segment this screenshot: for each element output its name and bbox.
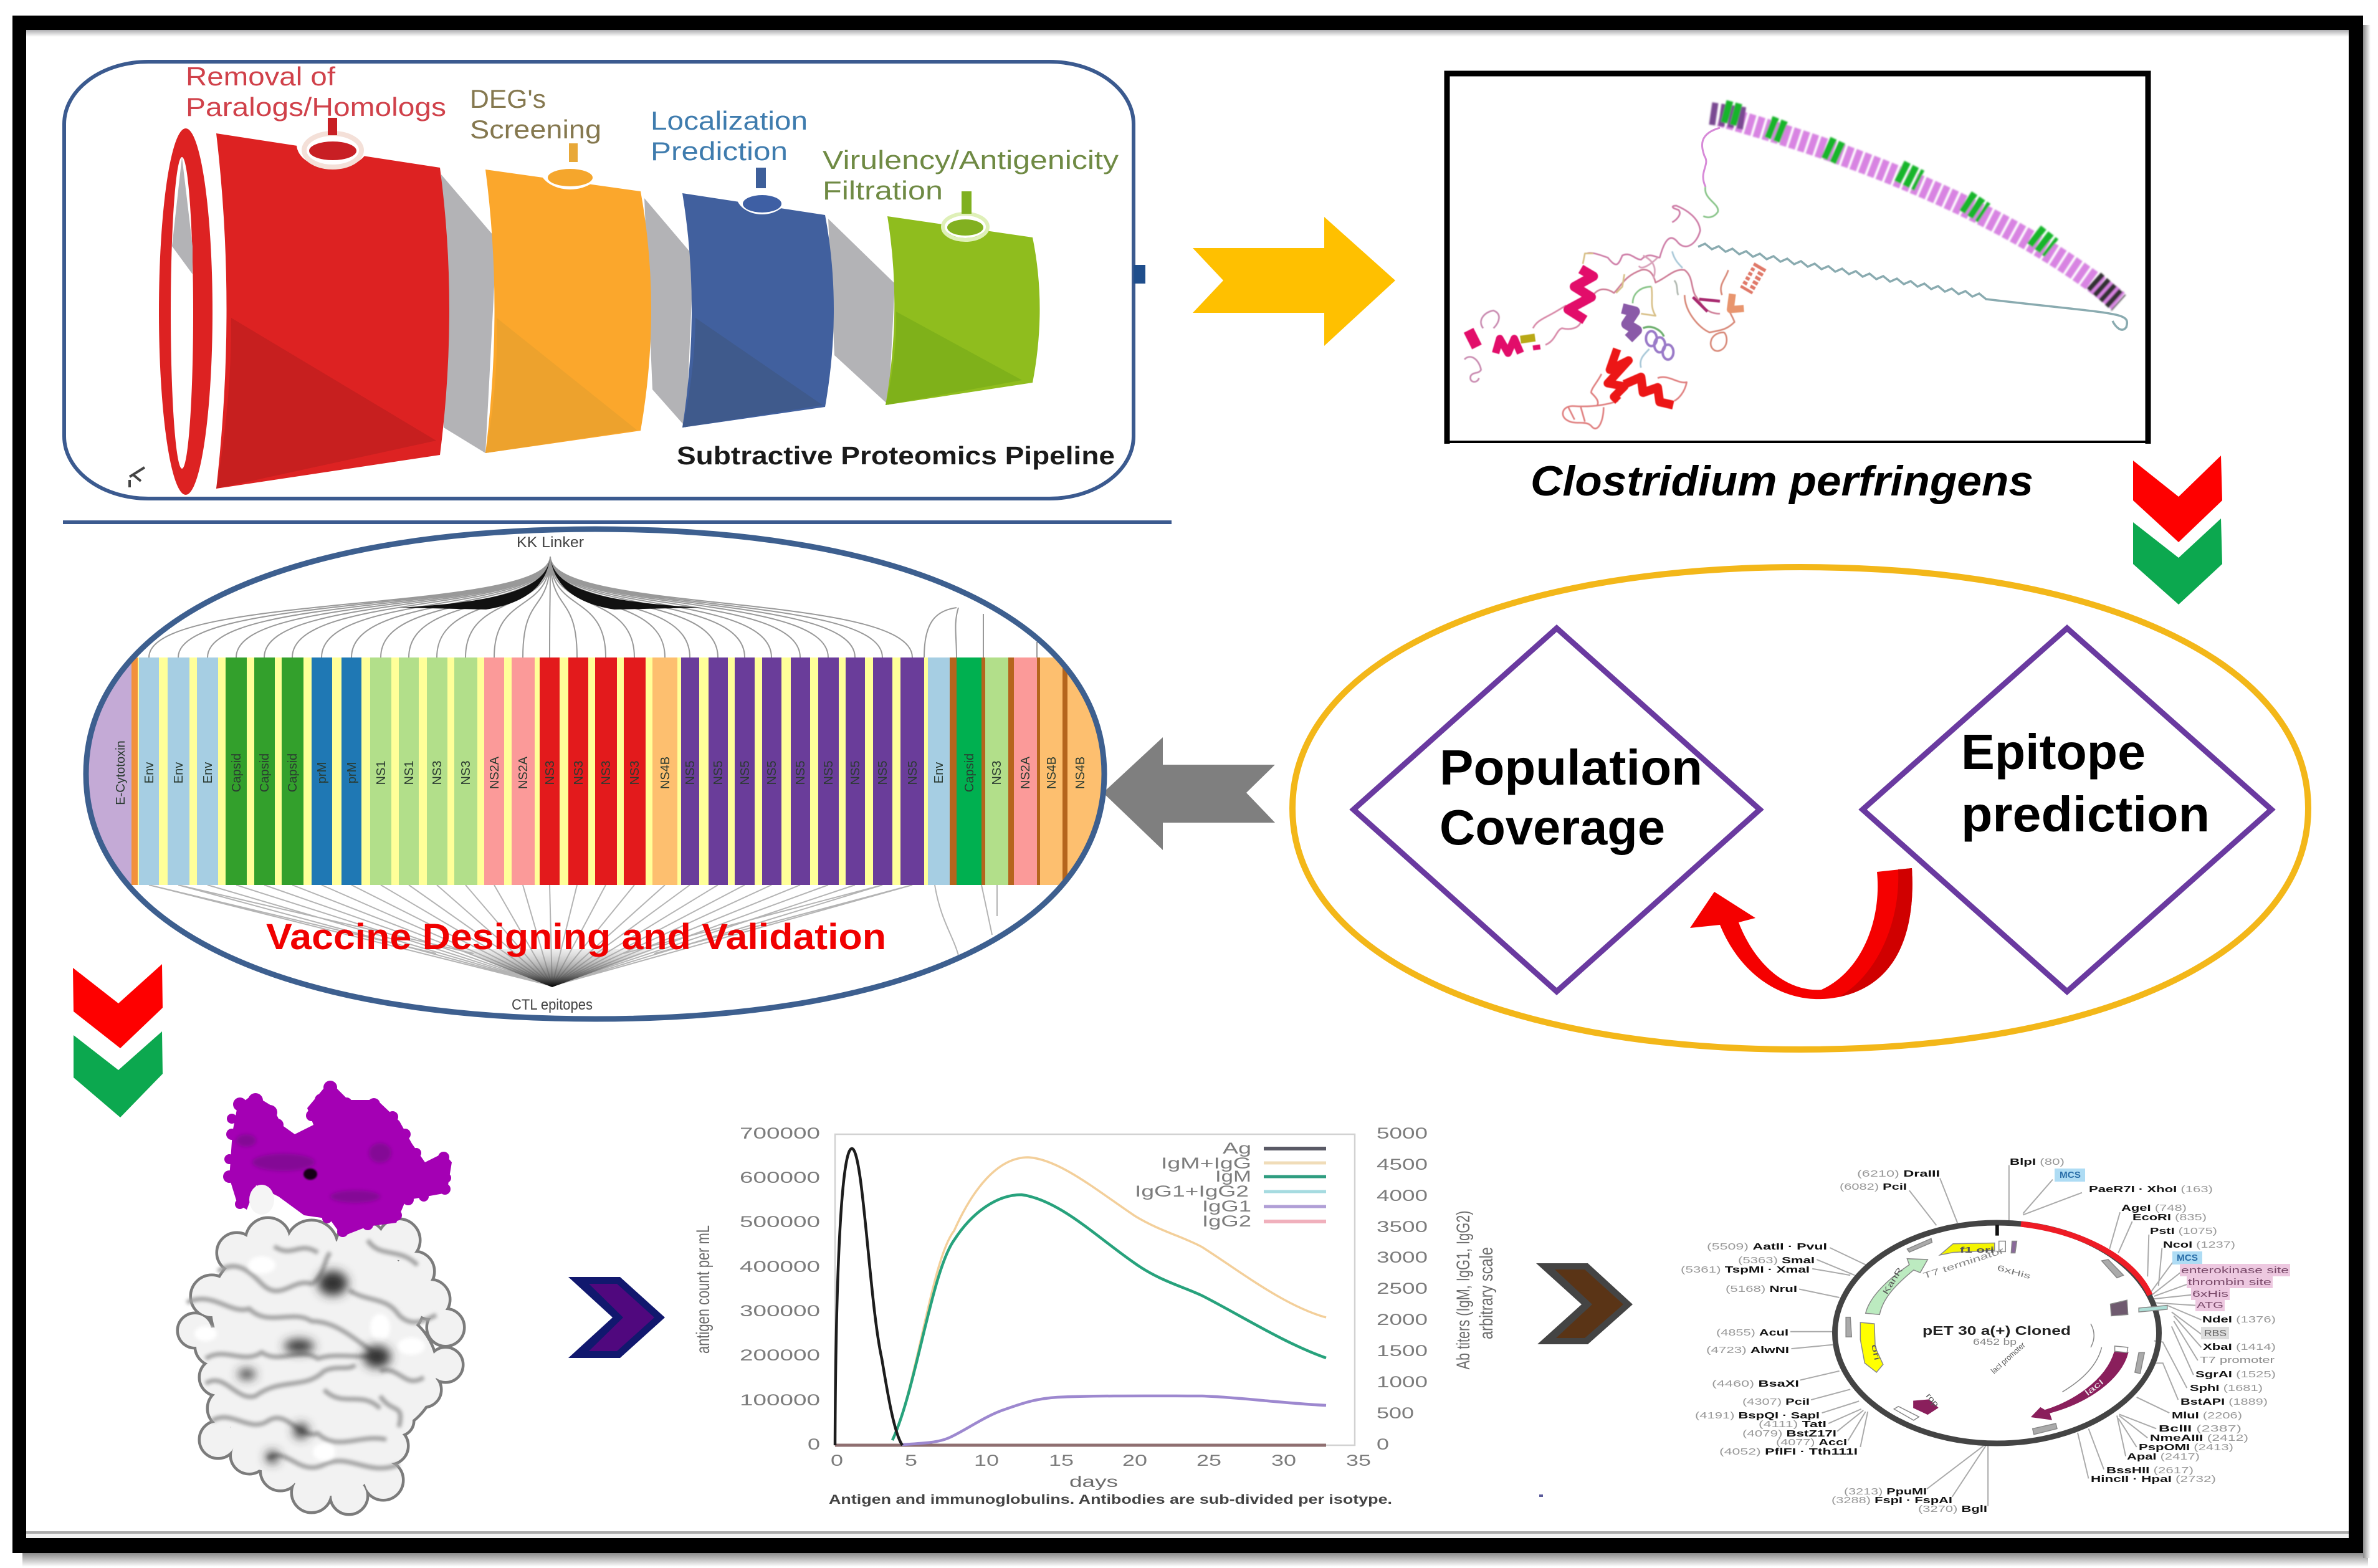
bar labels: Capsid [230,753,244,792]
chart legend: IgM+IgG [1161,1155,1251,1172]
bar labels: NS3 [572,761,586,785]
bar labels: NS5 [684,761,697,785]
bar labels: NS2A [517,756,530,789]
left axis labels: 700000 [740,1125,820,1142]
restriction site labels: PaeR7I · XhoI (163) [2089,1184,2213,1195]
panel: epitope prediction ellipse [1292,567,2308,1049]
small feature names: lacI promoter [1989,1340,2027,1375]
bar labels: NS2A [488,756,502,789]
restriction site labels: (4052) PflFI · Tth111I [1719,1446,1858,1457]
gray surface [179,1219,463,1513]
restriction site labels: BlpI (80) [2010,1157,2065,1167]
dark cavities [238,1271,391,1463]
restriction site labels: NdeI (1376) [2202,1314,2276,1325]
stage label: removal of paralogs/homologs: Removal of [186,62,335,91]
bar labels: NS3 [543,761,557,785]
small feature names: rop [1924,1391,1941,1408]
restriction site labels: thrombin site [2188,1277,2271,1288]
restriction site labels: (4723) AlwNI [1706,1345,1789,1355]
chart legend: IgG1 [1202,1198,1251,1215]
restriction site labels: ApaI (2417) [2127,1451,2200,1462]
structure frame [1446,74,2149,444]
immune simulation chart [693,1125,1497,1507]
restriction site labels: (6210) DraIII [1857,1169,1940,1179]
x axis labels [831,1452,1371,1470]
wiggly coil [1698,244,2127,330]
right axis title: Ab titers (IgM, IgG1, IgG2) [1453,1210,1474,1370]
feature tags [2055,1169,2290,1339]
right axis labels: 0 [1377,1436,1389,1453]
restriction site labels: (3288) FspI · FspAI [1831,1495,1952,1506]
restriction site labels: (4855) AcuI [1716,1327,1788,1338]
funnel stage: green [886,191,1039,405]
bar labels: E-Cytotoxin [114,740,128,805]
restriction site labels: (3213) PpuMI [1844,1486,1927,1497]
bar labels [114,740,1087,805]
x axis labels: 0 [831,1452,843,1470]
restriction site labels: EcoRI (835) [2132,1212,2207,1223]
plasmid ring [1835,1223,2159,1443]
funnel stage: red [159,118,449,495]
funnel stage: blue [682,168,834,428]
vaccine 3D surface model [179,1081,463,1513]
surface highlights [194,1256,425,1461]
bar labels: NS3 [599,761,613,785]
arrow: gray left [1103,737,1275,850]
chart legend: IgG1+IgG2 [1135,1183,1249,1200]
restriction site labels: (4079) BstZ17I [1742,1428,1836,1439]
divider line [63,520,1172,524]
bar labels: NS5 [849,761,862,785]
tree bottom label: CTL epitopes [512,997,593,1013]
epitope tree upper lines [149,557,1037,657]
restriction site labels: (4191) BspQI · SapI [1695,1410,1820,1421]
bar labels: Capsid [286,753,300,792]
bar labels: Capsid [963,753,977,792]
bar labels: Env [932,762,946,783]
restriction site labels: (4077) AccI [1776,1437,1847,1448]
purple shading [236,1134,391,1203]
chart legend: IgM [1215,1168,1251,1185]
curve: IgG2 [835,1443,1326,1447]
upper loop [1702,128,1720,187]
bar labels: NS5 [794,761,808,785]
yellow ellipse [1292,567,2308,1049]
restriction site labels: MluI (2206) [2172,1410,2242,1421]
right axis title [1453,1210,1497,1370]
curve: IgG1 [902,1396,1326,1445]
red helix [1608,349,1673,405]
x axis labels: 20 [1122,1452,1147,1470]
connector tick [1134,265,1145,284]
x axis title: days [1069,1473,1118,1491]
label: epitope prediction [1961,724,2210,842]
peptide bars [87,657,1103,885]
restriction site labels: AgeI (748) [2121,1203,2187,1213]
x axis labels: 30 [1271,1452,1296,1470]
restriction site labels: (3270) BglI [1918,1504,1987,1514]
surface shading [187,1240,436,1468]
bar labels: Env [143,762,156,783]
chart legend: Ag [1223,1140,1251,1157]
pipeline caption: Subtractive Proteomics Pipeline [677,441,1115,470]
small feature names: ori [1869,1344,1882,1361]
stage label: localization prediction: Localization [651,106,808,135]
left axis labels: 200000 [740,1347,820,1364]
left axis labels: 100000 [740,1392,820,1409]
restriction site labels: enterokinase site [2181,1265,2289,1276]
bar labels: NS5 [738,761,752,785]
chart legend [1135,1140,1326,1230]
restriction site labels: (4460) BsaXI [1712,1379,1799,1389]
arrow: yellow right [1193,217,1395,346]
restriction site labels: (5168) NruI [1726,1284,1797,1294]
plasmid map [1681,1157,2290,1514]
bar labels: NS3 [990,761,1004,785]
chart caption: Antigen and immunoglobulins. Antibodies are sub-divided per isotype. [829,1493,1392,1507]
restriction site labels: 6xHis [2192,1289,2228,1299]
restriction site labels: SphI (1681) [2190,1383,2263,1394]
bar labels: NS3 [628,761,642,785]
restriction site labels: PstI (1075) [2150,1226,2217,1236]
left axis labels: 300000 [740,1303,820,1320]
right axis title: arbitrary scale [1476,1247,1497,1339]
right axis labels: 5000 [1377,1125,1428,1142]
bar labels: Env [201,762,215,783]
small feature names: f1 ori [1960,1245,1994,1255]
lower fan apex [456,949,656,987]
plasmid size: 6452 bp [1973,1337,2017,1347]
restriction site labels: (5509) AatII · PvuI [1707,1241,1827,1252]
left axis labels [740,1125,820,1453]
bar labels: NS2A [1019,756,1033,789]
left axis labels: 600000 [740,1169,820,1187]
right axis labels: 1000 [1377,1374,1428,1391]
stage label: DEG screening [470,84,601,144]
x axis labels: 15 [1049,1452,1074,1470]
bar labels: NS5 [822,761,836,785]
red arc of ring [2021,1224,2150,1295]
panel: vaccine construct ellipse [86,529,1104,1019]
bar labels: NS5 [876,761,890,785]
right axis labels: 4500 [1377,1156,1428,1174]
panel: protein structure [1446,74,2149,444]
stage label: virulency/antigenicity filtration: Virulency/Antigenicity [823,145,1119,174]
restriction site labels: NmeAIII (2412) [2150,1433,2248,1443]
restriction site labels: BclII (2387) [2159,1423,2242,1434]
features [1846,1225,2167,1435]
label: population coverage: Population [1440,740,1702,795]
bar labels: NS5 [906,761,920,785]
right axis labels: 3500 [1377,1218,1428,1236]
small feature names: KanR [1881,1266,1904,1296]
diamond: epitope prediction [1863,628,2271,992]
bar labels: NS5 [712,761,725,785]
curve: IgM+IgG [892,1157,1326,1440]
restriction site labels: BssHII (2617) [2106,1465,2194,1476]
bar labels: NS1 [375,761,388,785]
stage label: DEG screening: Screening [470,115,601,144]
label: epitope prediction: Epitope [1961,724,2146,780]
right axis labels: 1500 [1377,1342,1428,1360]
dark pit [303,1169,317,1180]
small feature names: T7 terminator [1922,1245,2005,1281]
stage label: virulency/antigenicity filtration [823,145,1119,205]
vaccine heading: Vaccine Designing and Validation [266,917,886,957]
left axis labels: 500000 [740,1213,820,1231]
curve: antigen [835,1149,902,1445]
magenta helices [1469,269,1593,353]
bar labels: NS4B [659,757,672,789]
bar labels: NS4B [1074,757,1087,789]
restriction site labels: (6082) PciI [1840,1182,1907,1192]
epitope tree lower lines [149,885,997,986]
left axis labels: 400000 [740,1258,820,1276]
bar labels: NS4B [1045,757,1059,789]
panel outline [64,62,1134,499]
chevron: brown [1536,1263,1633,1344]
bar labels: Env [172,762,186,783]
x axis labels: 5 [905,1452,917,1470]
bar labels: NS5 [765,761,779,785]
white highlight below domain [249,1185,274,1215]
bar labels: prM [315,762,329,783]
restriction site labels: MCS [2060,1170,2081,1180]
bar labels: Capsid [258,753,272,792]
lilac rings [1646,331,1673,360]
small feature names: lacI [2083,1377,2106,1397]
stage label: virulency/antigenicity filtration: Filtration [823,176,943,205]
tree top label: KK Linker [517,534,584,551]
right axis labels [1377,1125,1428,1453]
restriction site labels: MCS [2177,1253,2198,1263]
stage label: localization prediction: Prediction [651,136,788,166]
bar labels: NS1 [403,761,416,785]
bar labels: NS3 [459,761,473,785]
restriction site labels: NcoI (1237) [2163,1240,2235,1250]
stage label: removal of paralogs/homologs [186,62,446,122]
right axis labels: 4000 [1377,1187,1428,1205]
purple helix [1622,308,1637,338]
bar labels: NS3 [431,761,444,785]
stage label: removal of paralogs/homologs: Paralogs/Homologs [186,92,446,122]
curve: IgM [892,1195,1326,1440]
bar labels: prM [345,762,359,783]
restriction site labels: T7 promoter [2200,1355,2275,1365]
long helix [1711,111,2119,303]
gray connectors between funnel stages [441,174,895,453]
x axis labels: 10 [974,1452,999,1470]
dark magenta strand [1693,297,1720,312]
right axis labels: 2000 [1377,1311,1428,1329]
restriction site labels: BstAPI (1889) [2180,1397,2268,1407]
dark fan wings [399,557,702,610]
diamond: population coverage [1354,628,1760,992]
funnel stage: orange [485,143,651,453]
right axis labels: 3000 [1377,1249,1428,1266]
right axis labels: 500 [1377,1405,1414,1422]
ellipse outline [86,529,1104,1019]
label: population coverage: Coverage [1440,800,1665,855]
arrow: red curved [1690,868,1912,999]
salmon blob [1731,294,1744,310]
restriction site labels: (4111) TatI [1759,1419,1826,1430]
small mark [130,467,145,487]
panel: subtractive proteomics pipeline [64,62,1145,499]
restriction site labels: (5363) SmaI [1738,1255,1815,1266]
restriction site labels: ATG [2197,1300,2223,1311]
stage label: localization prediction [651,106,808,166]
chevrons: red and green, left [73,964,163,1117]
plasmid title: pET 30 a(+) Cloned [1922,1324,2071,1338]
chart legend: IgG2 [1202,1213,1251,1230]
salmon helix [1746,266,1760,291]
small feature names: 6xHis [1996,1263,2032,1281]
stage label: DEG screening: DEG's [470,84,546,113]
leader lines [1790,1165,2201,1506]
right axis labels: 2500 [1377,1280,1428,1298]
restriction site labels: SgrAI (1525) [2195,1369,2276,1380]
restriction site labels: PspOMI (2413) [2139,1442,2233,1453]
olive segment [1521,338,1535,340]
restriction site labels [1681,1157,2289,1514]
restriction site labels: XbaI (1414) [2203,1342,2276,1352]
small dot [1539,1494,1543,1497]
label: epitope prediction: prediction [1961,786,2210,842]
restriction site labels: (4307) PciI [1742,1397,1810,1407]
central loops and helices [1464,187,1760,429]
purple domain [223,1081,452,1237]
x axis labels: 35 [1346,1452,1371,1470]
chevrons: red and green, top right [2133,456,2222,605]
left axis title: antigen count per mL [693,1225,714,1354]
small feature names [1869,1245,2106,1408]
chevron: navy [568,1277,665,1358]
left axis labels: 0 [808,1436,820,1453]
restriction site labels: RBS [2204,1328,2227,1339]
restriction site labels: HincII · HpaI (2732) [2091,1474,2216,1484]
plot frame [835,1134,1355,1445]
x axis labels: 25 [1196,1452,1221,1470]
label: population coverage [1440,740,1702,855]
organism name: Clostridium perfringens [1530,457,2033,505]
restriction site labels: (5361) TspMI · XmaI [1681,1264,1810,1275]
